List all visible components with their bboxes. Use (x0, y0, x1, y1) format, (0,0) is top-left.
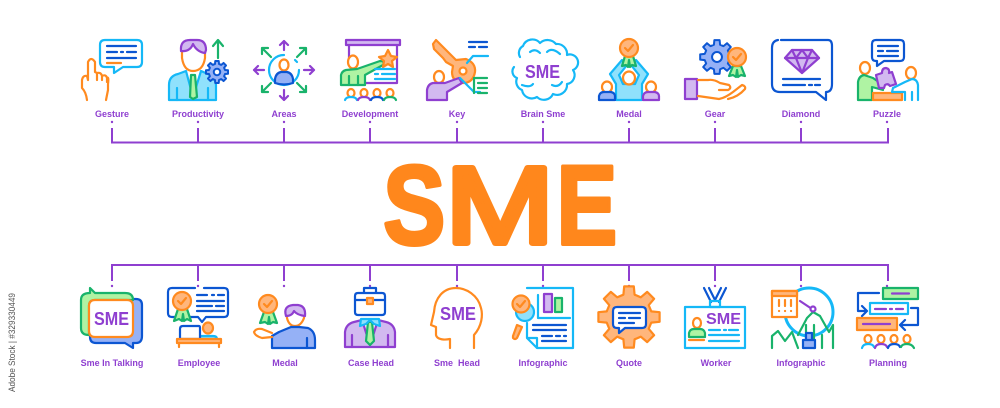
icon: sme head: SME (440, 304, 476, 324)
icon: brain sme: SME (525, 62, 560, 82)
stock image credit: Adobe Stock | #329330449 (7, 293, 18, 392)
icon: brain sme (512, 39, 578, 100)
icon: puzzle (858, 40, 918, 100)
label: quote: Quote (616, 358, 642, 368)
bottom connector line (111, 265, 888, 287)
icon: productivity (169, 40, 228, 100)
label: areas: Areas (271, 109, 297, 119)
label: development: Development (342, 109, 398, 119)
icon: infographic report (512, 288, 573, 348)
label: puzzle: Puzzle (873, 109, 901, 119)
icon: sme head (431, 288, 482, 348)
label: employee: Employee (178, 358, 220, 368)
icon: gesture (82, 40, 142, 100)
label: gesture: Gesture (95, 109, 129, 119)
icon: key (427, 40, 488, 100)
title (383, 143, 617, 268)
label: case head: Case Head (348, 358, 394, 368)
icon: medal (599, 39, 659, 100)
icon: quote gear (598, 286, 660, 348)
icon: infographic clock (772, 288, 833, 348)
icon: gear in hand (685, 40, 746, 99)
icon: development (341, 40, 400, 100)
label: diamond: Diamond (782, 109, 820, 119)
label: infographic report: Infographic (518, 358, 568, 368)
label: sme in talking: Sme In Talking (81, 358, 143, 368)
label: sme head: Sme Head (434, 358, 480, 368)
title: E (557, 143, 617, 268)
label: medal: Medal (616, 109, 642, 119)
icon: worker badge (685, 288, 745, 348)
title: M (445, 145, 554, 267)
label: brain sme: Brain Sme (521, 109, 565, 119)
icon: worker badge: SME (706, 311, 741, 328)
label: medal: Medal (272, 358, 298, 368)
icon: employee (168, 288, 228, 347)
label: worker: Worker (701, 358, 732, 368)
label: infographic clock: Infographic (776, 358, 826, 368)
icon: sme in talking (81, 288, 142, 348)
label: planning: Planning (869, 358, 907, 368)
label: productivity: Productivity (172, 109, 224, 119)
label: key: Key (449, 109, 465, 119)
icon: diamond (772, 40, 832, 100)
title: S (383, 143, 445, 268)
icon: areas (254, 41, 314, 100)
top connector line (111, 121, 888, 142)
icon: medal worker (254, 295, 315, 348)
icon: case head (345, 288, 395, 347)
label: gear: Gear (705, 109, 726, 119)
icon: sme in talking: SME (94, 309, 129, 329)
icon: planning (857, 288, 918, 348)
